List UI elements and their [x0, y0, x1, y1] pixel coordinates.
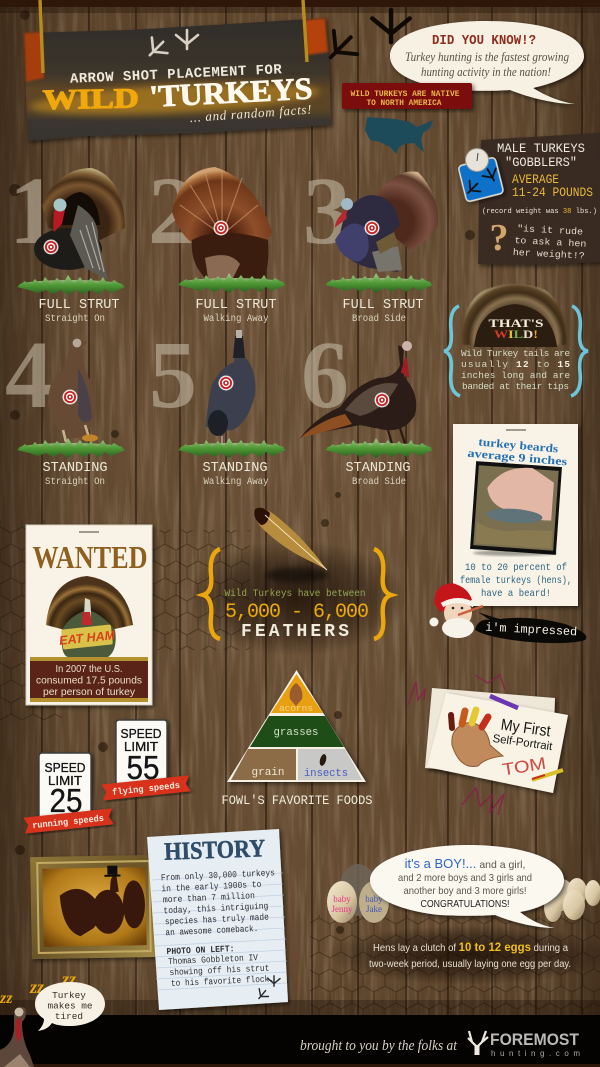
food pyramid: grasses: [274, 727, 318, 739]
wanted turkey: [46, 576, 133, 657]
card: wanted: consumed 17.5 pounds: [36, 674, 142, 686]
eggs left: [327, 864, 389, 923]
grain tier: [231, 749, 296, 780]
rude joke: her weight!?: [513, 247, 585, 262]
card: wanted: In 2007 the U.S.: [56, 663, 122, 675]
labels row 1: Straight On: [45, 313, 105, 325]
card: my first self-portrait: [425, 688, 568, 793]
bubble text: Turkey: [52, 990, 86, 1001]
beard heading: turkey beards: [478, 437, 559, 456]
speech bubble: it's a boy: and 2 more boys and 3 girls and: [398, 872, 532, 884]
speech bubble: it's a boy: CONGRATULATIONS!: [420, 898, 510, 910]
speech bubble: did you know: hunting activity in the nation!: [421, 65, 551, 79]
photo caption: PHOTO ON LEFT:: [166, 944, 235, 957]
beard fact: 10 to 20 percent of: [465, 562, 567, 574]
pyramid backing: [227, 670, 366, 782]
history text: an awesome comeback.: [165, 924, 259, 938]
card: my first self-portrait: Self-Portrait: [492, 733, 554, 753]
labels row 2: STANDING: [202, 460, 268, 476]
rude joke: to ask a hen: [514, 235, 587, 250]
labels row 1: Walking Away: [204, 313, 268, 325]
pilgrim hat: [104, 866, 120, 877]
turkey 5 standing walking away: [206, 330, 256, 447]
history text: in the early 1900s to: [161, 880, 262, 894]
ribbon: running speeds: running speeds: [32, 814, 104, 831]
labels row 2: STANDING: [42, 460, 108, 476]
food pyramid: [222, 670, 373, 808]
bubble heading: DID YOU KNOW!?: [432, 33, 536, 49]
wanted slot: [79, 531, 99, 533]
labels row 2: STANDING: [346, 460, 410, 476]
gobblers heading: MALE TURKEYS: [497, 141, 585, 156]
labels row 2: Walking Away: [204, 476, 268, 488]
ruled lines: [152, 873, 287, 990]
labels row 1: Broad Side: [352, 313, 406, 325]
cyan braces: [444, 306, 588, 396]
record weight: (record weight was 38 lbs.): [482, 208, 597, 216]
insects tier: [298, 749, 362, 780]
labels row 1: FULL STRUT: [196, 297, 276, 313]
turkey 4 standing straight on: [48, 339, 98, 442]
grass 2: [178, 273, 286, 293]
TURKEYS: 'TURKEYS: [149, 71, 313, 114]
panel: male turkeys gobblers: 11-24 POUNDS: [512, 186, 593, 200]
wanted heading: WANTED: [32, 539, 148, 575]
turkey 1 full strut straight on: [34, 168, 125, 280]
dark backdrop: [186, 540, 406, 656]
pyramid caption: FOWL'S FAVORITE FOODS: [222, 793, 373, 808]
panel: male turkeys gobblers: "GOBBLERS": [505, 155, 577, 170]
photo shadow: [473, 550, 557, 556]
ribbon: running speeds: [23, 808, 114, 834]
egg baby jake: [359, 881, 389, 923]
badge fan: [461, 284, 567, 345]
footer band: [0, 1015, 600, 1067]
card: wanted: per person of turkey: [43, 686, 136, 698]
speed limit 55 sign: LIMIT: [124, 739, 158, 754]
beard fact: [460, 562, 572, 600]
sign tracks: [142, 30, 198, 63]
tail fact: [461, 348, 570, 392]
speed limit 25 sign: [39, 753, 91, 819]
ribbon: flying speeds: flying speeds: [112, 781, 180, 798]
grass 3: [325, 273, 433, 293]
food pyramid: grain: [252, 767, 284, 779]
framed painting: [30, 855, 158, 959]
question mark: ?: [490, 217, 508, 259]
title glow: [29, 77, 321, 121]
subtitle: ... and random facts!: [189, 102, 312, 125]
egg baby jenny: [327, 881, 357, 923]
egg baby jake: baby: [365, 894, 383, 904]
card slot: [506, 429, 526, 431]
grass 1: [17, 275, 125, 295]
beard heading: [467, 437, 568, 468]
callout: native to north america: [342, 83, 472, 109]
average weight: AVERAGE: [512, 173, 559, 187]
feather lead-in: Wild Turkeys have between: [224, 588, 366, 600]
crayon: [532, 770, 563, 780]
beard fact: have a beard!: [481, 588, 551, 600]
ribbon: flying speeds: [101, 775, 191, 800]
bubble: [35, 982, 105, 1031]
tail fact: banded at their tips: [462, 381, 569, 392]
icon: feather: [254, 508, 329, 583]
panel: that's wild: [444, 284, 588, 396]
note tracks: [254, 976, 280, 1002]
painted turkeys: [59, 875, 145, 937]
food pyramid: insects: [304, 768, 348, 780]
grasses tier: [250, 716, 344, 747]
speech bubble: i'm impressed: [475, 612, 586, 643]
large stencil numbers: 4: [5, 321, 53, 428]
history text: today, this intriguing: [163, 902, 269, 916]
icon: USA map: [365, 117, 433, 154]
clutch fact: two-week period, usually laying one egg per day.: [369, 959, 571, 970]
history text: more than 7 million: [163, 891, 255, 905]
labels row 2: [42, 460, 410, 488]
icon: deer logo: [468, 1031, 488, 1055]
speed limit 55 sign: SPEED: [120, 726, 162, 741]
panel: that's wild: WILD!: [494, 329, 538, 341]
clutch fact: Hens lay a clutch of 10 to 12 eggs during a: [373, 940, 568, 954]
callout: native to north america: WILD TURKEYS ARE NATIVE: [350, 89, 460, 99]
ropes: [40, 0, 307, 73]
sleeping letters: [0, 969, 76, 1007]
tail fact: usually 12 to 15: [461, 359, 570, 370]
turkey 2 full strut walking away: [172, 167, 272, 280]
speed limit 25 sign: 25: [50, 782, 82, 819]
speed limit 25 sign: SPEED: [44, 760, 86, 775]
rude joke: "is it rude: [517, 223, 584, 238]
speech bubble: it's a boy: another boy and 3 more girls!: [404, 885, 526, 897]
orange corners: [24, 32, 44, 82]
callout: native to north america: TO NORTH AMERICA: [366, 98, 442, 108]
title line: ARROW SHOT PLACEMENT FOR: [70, 62, 283, 88]
photo caption: showing off his strut: [169, 964, 270, 978]
feather range: 5,000 - 6,000: [225, 601, 369, 624]
bubble text: tired: [55, 1011, 83, 1022]
scribbles: [408, 675, 505, 815]
eggs right: [544, 878, 600, 922]
eat ham sign: EAT HAM: [59, 628, 116, 648]
card: turkey beards: [453, 424, 578, 606]
bubble text: Turkey hunting is the fastest growing: [405, 50, 569, 64]
tail fact: Wild Turkey tails are: [461, 348, 570, 359]
large stencil numbers: 2: [148, 157, 196, 264]
food pyramid: acorns: [279, 703, 313, 714]
speech bubble: it's a boy: [370, 845, 564, 928]
history text: species has truly made: [165, 913, 269, 927]
feathers word: FEATHERS: [241, 622, 349, 642]
large stencil numbers: 1: [9, 157, 57, 264]
large stencil numbers: [5, 157, 351, 428]
footer band: hunting.com: [491, 1049, 580, 1058]
large stencil numbers: 5: [149, 321, 197, 428]
icon: bathroom scale: [458, 148, 504, 202]
speed limit 25 sign: LIMIT: [48, 773, 82, 788]
speech bubble: it's a boy: it's a BOY!... and a girl,: [405, 856, 525, 871]
sleeping letters: zz: [0, 990, 13, 1007]
WILD: WILD: [43, 83, 139, 116]
labels row 2: Straight On: [45, 476, 105, 488]
bubble text: [47, 990, 93, 1022]
consumption box: [30, 657, 148, 702]
photo caption: [166, 942, 274, 989]
panel: male turkeys gobblers: [458, 133, 600, 265]
photo caption: Thomas Gobbleton IV: [168, 953, 259, 967]
tom signature: TOM: [501, 754, 547, 779]
large stencil numbers: 3: [303, 157, 351, 264]
tail fact: inches long and are: [461, 370, 570, 381]
grass 5: [178, 438, 286, 458]
purple tape: [490, 696, 518, 708]
history heading: HISTORY: [164, 835, 266, 866]
hand turkey: [451, 710, 503, 767]
note: history: [147, 829, 288, 1010]
card: wanted: [26, 525, 152, 705]
sleepy turkey: [0, 969, 105, 1067]
labels row 1: FULL STRUT: [38, 297, 120, 313]
hanging sign board: [24, 18, 331, 141]
card text: My First: [500, 717, 552, 741]
bubble text: makes me: [47, 1000, 93, 1012]
title sign: [24, 0, 331, 141]
turkey 6 standing broad side: [300, 341, 416, 444]
shot placement grid: [5, 157, 438, 488]
orange braces: [203, 549, 391, 639]
large stencil numbers: 6: [301, 321, 349, 428]
icon: santa with note: [430, 583, 483, 638]
egg baby jenny: Jenny: [332, 904, 353, 914]
foremost wordmark: FOREMOST: [490, 1030, 580, 1049]
labels row 2: Broad Side: [352, 476, 406, 488]
egg baby jake: Jake: [366, 904, 382, 914]
clutch fact: [325, 925, 600, 985]
labels row 1: [38, 297, 424, 325]
badge words: THAT'S: [488, 318, 544, 330]
photo caption: to his favorite flock.: [171, 974, 274, 989]
speech bubble: i'm impressed: i'm impressed: [485, 621, 577, 639]
turkey 3 full strut broad side: [335, 171, 438, 272]
turkey figure: [0, 1007, 34, 1067]
grass 4: [17, 438, 125, 458]
rude joke: [513, 223, 587, 262]
egg baby jenny: baby: [333, 894, 351, 904]
sleeping letters: zz: [29, 977, 44, 997]
grass 6: [325, 438, 433, 458]
sleeping letters: zz: [61, 969, 76, 989]
footer credit: brought to you by the folks at: [300, 1038, 458, 1054]
history text: [161, 868, 278, 938]
history text: From only 30,000 turkeys: [161, 868, 275, 883]
speed limit 55 sign: 55: [126, 749, 160, 786]
labels row 1: FULL STRUT: [342, 297, 424, 313]
speech bubble: did you know: [390, 21, 584, 104]
beard heading: average 9 inches: [467, 448, 568, 468]
feathers fact: [186, 508, 406, 656]
beard fact: female turkeys (hens),: [460, 575, 572, 587]
beard photo: [470, 461, 562, 555]
acorns tier: [271, 674, 323, 713]
speed limit 55 sign: [116, 720, 167, 788]
icon: black bird tracks: [319, 10, 410, 69]
